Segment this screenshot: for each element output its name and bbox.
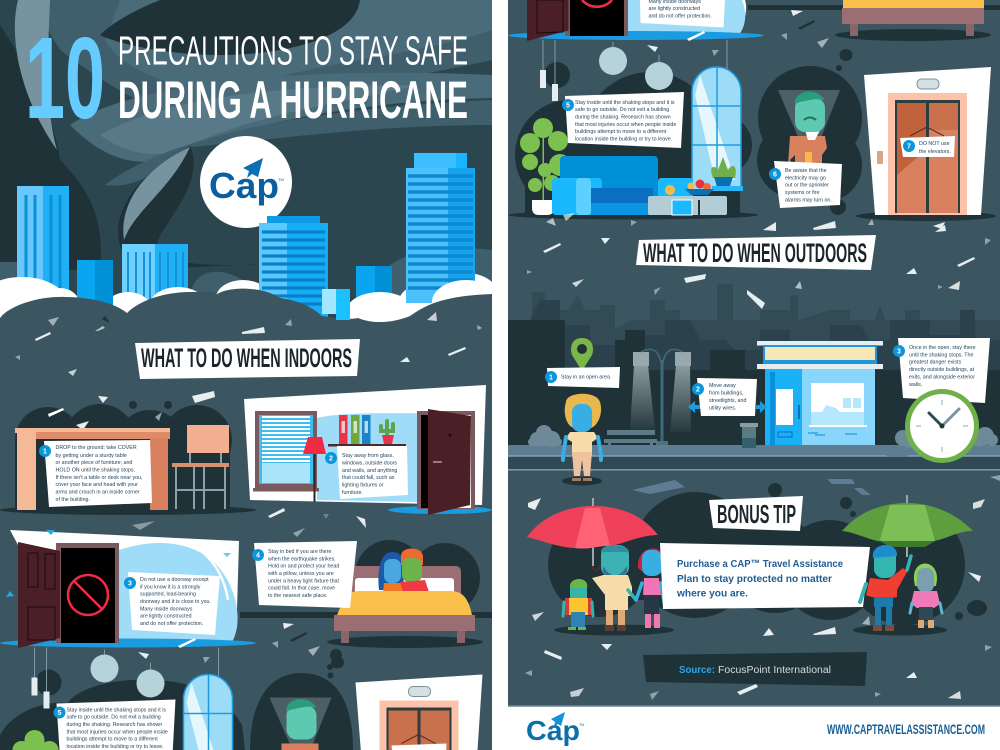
arrows — [688, 401, 767, 413]
text: outdoor step 3: directly outside buildings, at — [909, 367, 975, 373]
man with flashlight top — [270, 698, 332, 750]
text: step 5: Stay inside until the shaking stops and it is — [66, 708, 166, 714]
bonus backdrop — [548, 483, 987, 625]
text: step 5: during the shaking. Research has shown — [66, 722, 162, 728]
debris cloud foreground — [0, 288, 492, 333]
bench — [604, 430, 657, 446]
light cone — [778, 90, 840, 160]
text: step 1: by getting under a sturdy table — [56, 453, 127, 459]
text: step 3: Many inside doorways — [140, 606, 193, 612]
text: step 2: 2 — [329, 456, 333, 462]
child — [563, 579, 593, 630]
text: step 6: 6 — [773, 172, 777, 178]
scene 5: living room — [508, 40, 758, 220]
text: step 1: arms and crouch in an inside corner — [56, 490, 140, 496]
source bar — [643, 652, 867, 686]
debris — [647, 10, 829, 56]
text: step 5 — [562, 92, 684, 148]
arched window — [184, 674, 232, 750]
text: step 6: systems or fire — [785, 190, 819, 196]
source bar: Source: — [679, 665, 715, 676]
thought bubbles — [328, 656, 344, 678]
footer logo: TM — [579, 723, 584, 727]
text: step 6: alarms may turn on. — [785, 198, 832, 204]
woman red hair — [636, 548, 665, 628]
white clouds — [0, 274, 492, 322]
street lamps — [630, 349, 691, 445]
heading: what to do when outdoors — [636, 235, 876, 270]
bushes — [528, 425, 998, 448]
text: step 3 — [124, 572, 220, 635]
text: step 3: Do not use a doorway except — [140, 577, 209, 583]
white debris on desk cloud — [48, 408, 162, 430]
man in red — [860, 545, 911, 631]
text: step 1: DROP to the ground; take COVER — [56, 445, 137, 451]
text: step 3: are lightly constructed — [140, 614, 192, 620]
door leaf — [18, 542, 60, 648]
text: step 3: supported, load-bearing — [140, 592, 196, 598]
bonus debris — [525, 498, 992, 700]
woman in pink — [910, 564, 942, 628]
text: outdoor step 1: 1 — [549, 374, 553, 382]
logo: Cap circle: TM — [278, 177, 284, 182]
no entry sign — [68, 575, 108, 615]
text: outdoor step 2: utility wires. — [709, 406, 736, 412]
source bar: FocusPoint International — [718, 665, 831, 676]
heading: what to do when indoors — [135, 339, 360, 379]
text: outdoor step 3 — [893, 338, 990, 403]
dark cloud behind desk — [15, 401, 232, 510]
scattered debris outdoors heading — [527, 213, 991, 309]
text: outdoor step 2: 2 — [696, 386, 700, 394]
scene 1: desk — [0, 401, 256, 515]
scene 2: window lamp door — [244, 385, 492, 515]
family right — [853, 545, 947, 636]
text: step 2: and walls, and anything — [342, 468, 397, 474]
text: outdoor step 3: Once in the open, stay there — [909, 345, 976, 351]
door — [417, 409, 475, 515]
chair — [172, 425, 229, 509]
text: step 5: 5 — [566, 102, 570, 110]
store — [757, 341, 883, 445]
blue floor — [0, 638, 256, 648]
plant — [520, 118, 571, 215]
scene 4: bed — [240, 540, 492, 648]
call button — [877, 151, 883, 164]
green umbrella — [842, 495, 973, 557]
text: step 2: Stay away from glass, — [342, 453, 394, 459]
text: step 5: that most injuries occur when people inside — [575, 122, 676, 128]
text: step 1: of the building. — [56, 497, 90, 503]
debris scraps indoors header — [15, 312, 482, 377]
desk — [15, 428, 170, 510]
elevator top — [356, 674, 482, 750]
text: step 3: doorway and it is close to you. — [140, 599, 211, 605]
small building in front of clouds — [322, 289, 350, 320]
window — [253, 411, 319, 492]
text: step 7: DO NOT use — [919, 141, 950, 147]
text: step 2: furniture. — [342, 490, 363, 496]
text: step 1: If there isn't a table or desk near you, — [56, 475, 142, 481]
woman in open area — [562, 394, 602, 486]
text: outdoor step 3: exits, and alongside exterior — [909, 374, 975, 380]
doorway frame — [56, 543, 119, 643]
text: step 5: safe to go outside. Do not exit a building — [575, 107, 669, 113]
text: step 2: lighting fixtures or — [342, 482, 384, 488]
title: 10 — [25, 13, 105, 143]
text: step 6: electricity may go — [785, 176, 826, 182]
text: outdoor step 3: greatest danger exists — [909, 360, 961, 366]
plant top — [12, 730, 58, 750]
pendant lights — [32, 648, 222, 708]
text: step 4: could fall. In that case, move — [268, 586, 335, 592]
text: step 7: the elevators. — [919, 149, 951, 155]
elevator indicator — [917, 79, 939, 89]
shadow — [0, 507, 256, 515]
dark backdrop for lower scenes — [0, 673, 353, 750]
text: step 6: out or the sprinkler — [785, 182, 829, 188]
text: step 1: or another piece of furniture; and — [56, 460, 132, 466]
text: step 4: to the nearest safe place. — [268, 593, 327, 599]
clock — [905, 389, 979, 463]
text: step 5: safe to go outside. Do not exit a building — [66, 714, 161, 720]
title: DURING A HURRICANE — [118, 71, 468, 130]
logo: Cap circle: Cap — [209, 165, 279, 206]
family left — [554, 545, 674, 636]
title: PRECAUTIONS TO STAY SAFE — [118, 28, 468, 74]
text: outdoor step 2 — [692, 378, 757, 416]
text: step 4: with a pillow, unless you are — [268, 571, 334, 577]
text: step 3: if you know it is a strongly — [140, 584, 201, 590]
shelf with binders — [328, 415, 406, 446]
text: step 5: during the shaking. Research has shown — [575, 114, 671, 120]
text: step 2: that could fall, such as — [342, 475, 395, 481]
text: step 5: 5 — [58, 710, 62, 717]
buildings in front of clouds — [77, 153, 500, 324]
bonus text card — [660, 543, 870, 609]
text: step 1: cover your face and head with your — [56, 482, 138, 488]
logo: Cap circle — [200, 136, 292, 228]
heading: bonus tip — [709, 496, 803, 531]
buildings behind clouds — [17, 186, 392, 310]
hurricane sky — [0, 0, 492, 320]
text: step 5 — [54, 700, 176, 750]
scene 6: man with flashlight — [757, 49, 862, 215]
text: step 2 — [325, 446, 408, 499]
pendant lights — [540, 40, 730, 101]
thought bubbles — [836, 49, 852, 71]
dark cloud — [240, 540, 492, 618]
text: outdoor step 2: streetlights, and — [709, 398, 746, 404]
scene 3 bottom: and do not offer protection. — [648, 14, 712, 20]
text: step 5: Stay inside until the shaking stops and it is — [575, 100, 675, 106]
man with beard — [592, 545, 636, 631]
text: step 3: and do not offer protection. — [140, 621, 203, 627]
trash can — [740, 423, 758, 448]
coffee table and fruit — [648, 180, 727, 215]
text: step 1: 1 — [43, 448, 47, 456]
bonus text card: Purchase a CAP™ Travel Assistance — [677, 558, 843, 570]
text: step 5: that most injuries occur when people inside — [66, 730, 168, 736]
text: outdoor step 3: walls. — [909, 382, 922, 388]
map pin — [571, 338, 593, 371]
text: step 4: 4 — [256, 552, 260, 560]
blue floor — [388, 506, 492, 514]
scene 7: elevator — [856, 67, 996, 221]
text: step 7 — [900, 136, 955, 157]
text: step 1 — [39, 440, 152, 507]
panel: right column — [508, 0, 1000, 707]
text: step 5: location inside the building or try to leave. — [575, 136, 672, 142]
continued scenes 3 and 4 — [508, 0, 1000, 56]
bed — [327, 566, 483, 648]
text: step 4: under a heavy light fixture that — [268, 578, 339, 584]
scenes 5-7 top portion (left column) — [12, 648, 482, 750]
text: outdoor step 2: from buildings, — [709, 390, 743, 396]
man — [788, 91, 827, 166]
arched window — [692, 67, 743, 191]
text: outdoor step 2: Move away — [709, 383, 736, 389]
text: step 4: when the earthquake strikes. — [268, 556, 336, 562]
couple — [378, 548, 429, 592]
text: outdoor step 1: Stay in an open area. — [561, 374, 611, 380]
sofa — [552, 156, 693, 215]
footer logo: Cap — [526, 715, 580, 746]
bonus text card: Plan to stay protected no matter — [677, 573, 832, 585]
text: step 5: buildings attempt to move to a different — [575, 129, 667, 135]
dark cloud — [757, 66, 862, 215]
elevator frame and doors — [888, 93, 967, 215]
text: step 5: location inside the building or try to leave. — [66, 744, 164, 750]
floor lamp — [303, 437, 326, 502]
shadow — [508, 210, 758, 220]
text: outdoor step 3: until the shaking stops. The — [909, 352, 973, 358]
scene 4 bottom — [748, 0, 1000, 41]
text: step 5: buildings attempt to move to a different — [66, 736, 158, 742]
street — [508, 445, 1000, 495]
text: step 1: HOLD ON until the shaking stops. — [56, 468, 135, 474]
title — [30, 36, 467, 119]
text: step 6 — [769, 161, 842, 208]
city silhouette — [508, 284, 1000, 450]
scattered debris middle — [6, 391, 366, 670]
text: step 6: Be aware that the — [785, 168, 827, 174]
scene 3: doorway — [0, 530, 256, 648]
text: step 4: Hold on and protect your head — [268, 564, 339, 570]
text: step 2: windows, outside doors — [342, 460, 397, 466]
panel: left column — [0, 0, 500, 750]
bonus text card: where you are. — [676, 588, 748, 600]
text: step 3: 3 — [128, 580, 132, 588]
scene 3 bottom — [508, 0, 764, 41]
heading: what to do when indoors: WHAT TO DO WHEN INDOORS — [141, 343, 352, 373]
heading: bonus tip: BONUS TIP — [717, 499, 796, 529]
text: step 4: Stay in bed if you are there — [268, 549, 331, 555]
red umbrella — [527, 498, 658, 570]
dark backdrop — [515, 62, 752, 215]
text: outdoor step 1 — [545, 367, 620, 388]
text: outdoor step 3: 3 — [897, 348, 901, 356]
text: step 7: 7 — [907, 144, 911, 150]
scene 3 bottom: are lightly constructed — [648, 6, 700, 12]
text: step 4 — [252, 541, 357, 608]
